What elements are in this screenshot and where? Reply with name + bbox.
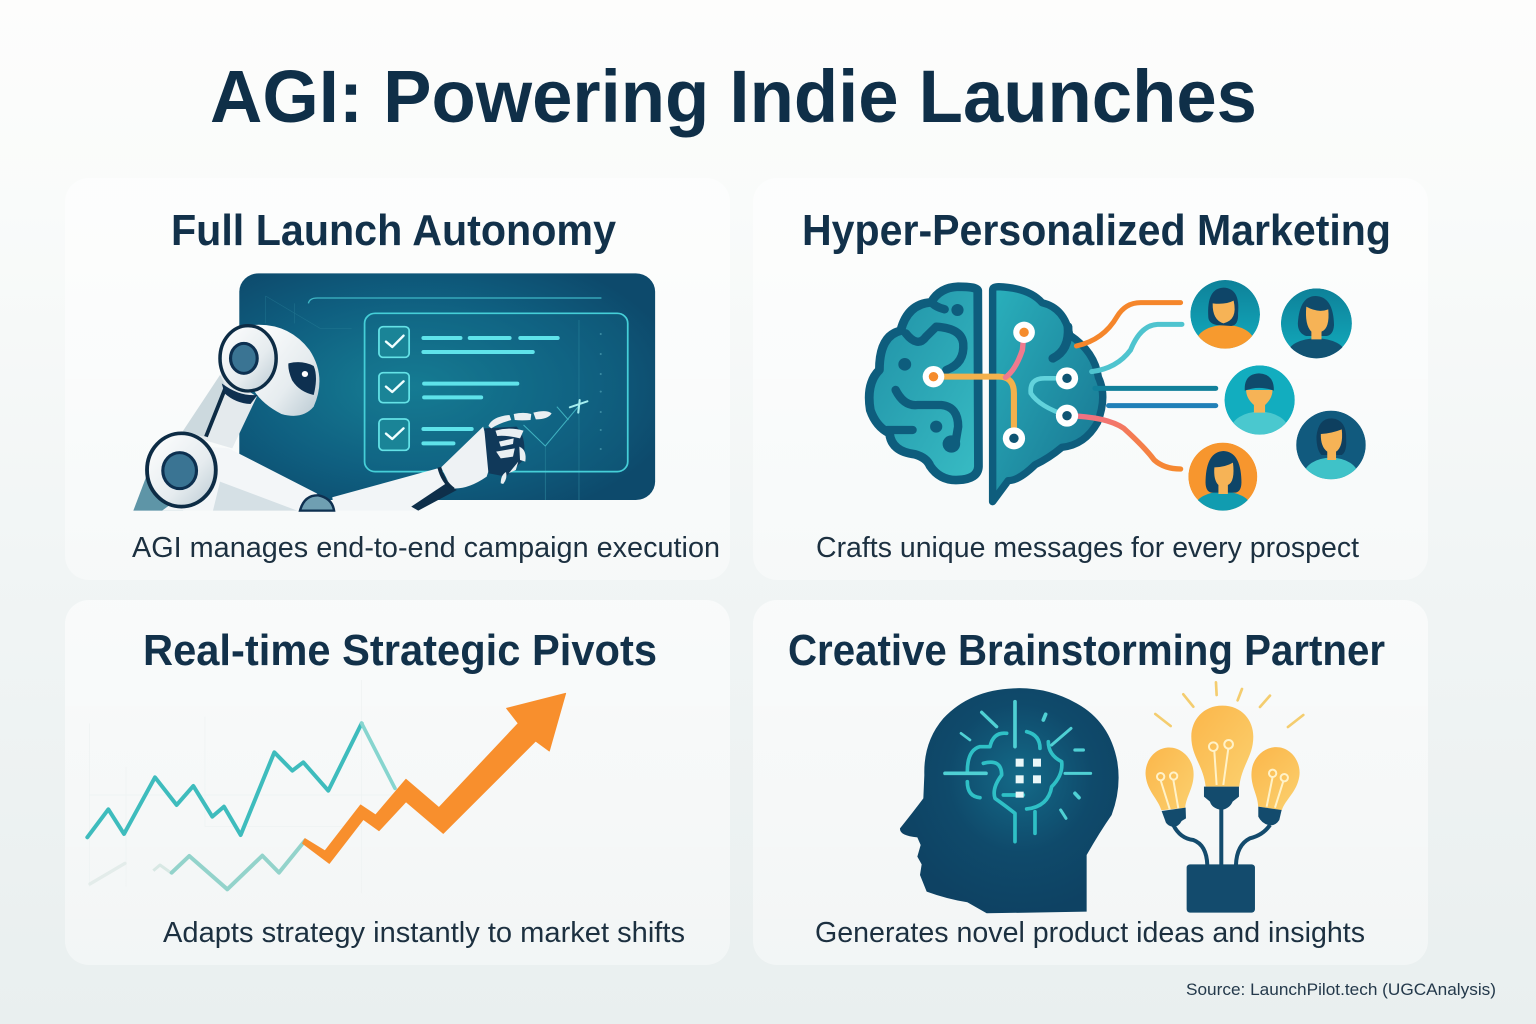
panel: hyper-personalized marketing bbox=[804, 214, 1388, 563]
caption: creative brainstorming partner: Generates novel product ideas and insights bbox=[815, 917, 1365, 949]
illustration: robot at checklist board bbox=[133, 273, 655, 511]
caption: full launch autonomy: AGI manages end-to-end campaign execution bbox=[132, 532, 720, 564]
heading: hyper-personalized marketing: Hyper-Personalized Marketing bbox=[802, 206, 1391, 255]
panel: real-time strategic pivots bbox=[65, 600, 730, 965]
heading: real-time strategic pivots: Real-time Strategic Pivots bbox=[143, 626, 657, 675]
illustration: brain connected to people bbox=[869, 280, 1366, 522]
avatars bbox=[1190, 280, 1260, 349]
illustration: three light bulbs bbox=[1143, 682, 1303, 913]
illustration: head with circuit brain bbox=[900, 688, 1119, 913]
source note: Source: LaunchPilot.tech (UGCAnalysis) bbox=[1186, 980, 1496, 999]
heading: full launch autonomy: Full Launch Autonomy bbox=[171, 206, 616, 255]
panel: creative brainstorming partner bbox=[753, 600, 1428, 965]
caption: real-time strategic pivots: Adapts strategy instantly to market shifts bbox=[163, 917, 685, 949]
robot body bbox=[133, 470, 183, 511]
chart: pivoting trend lines with orange arrow bbox=[87, 680, 566, 893]
caption: hyper-personalized marketing: Crafts unique messages for every prospect bbox=[816, 532, 1359, 564]
connection lines bbox=[933, 303, 1216, 469]
circuit nodes bbox=[1013, 322, 1035, 343]
title: AGI: Powering Indie Launches bbox=[210, 55, 1257, 138]
panel: full launch autonomy bbox=[65, 178, 730, 580]
heading: creative brainstorming partner: Creative Brainstorming Partner bbox=[788, 626, 1385, 675]
